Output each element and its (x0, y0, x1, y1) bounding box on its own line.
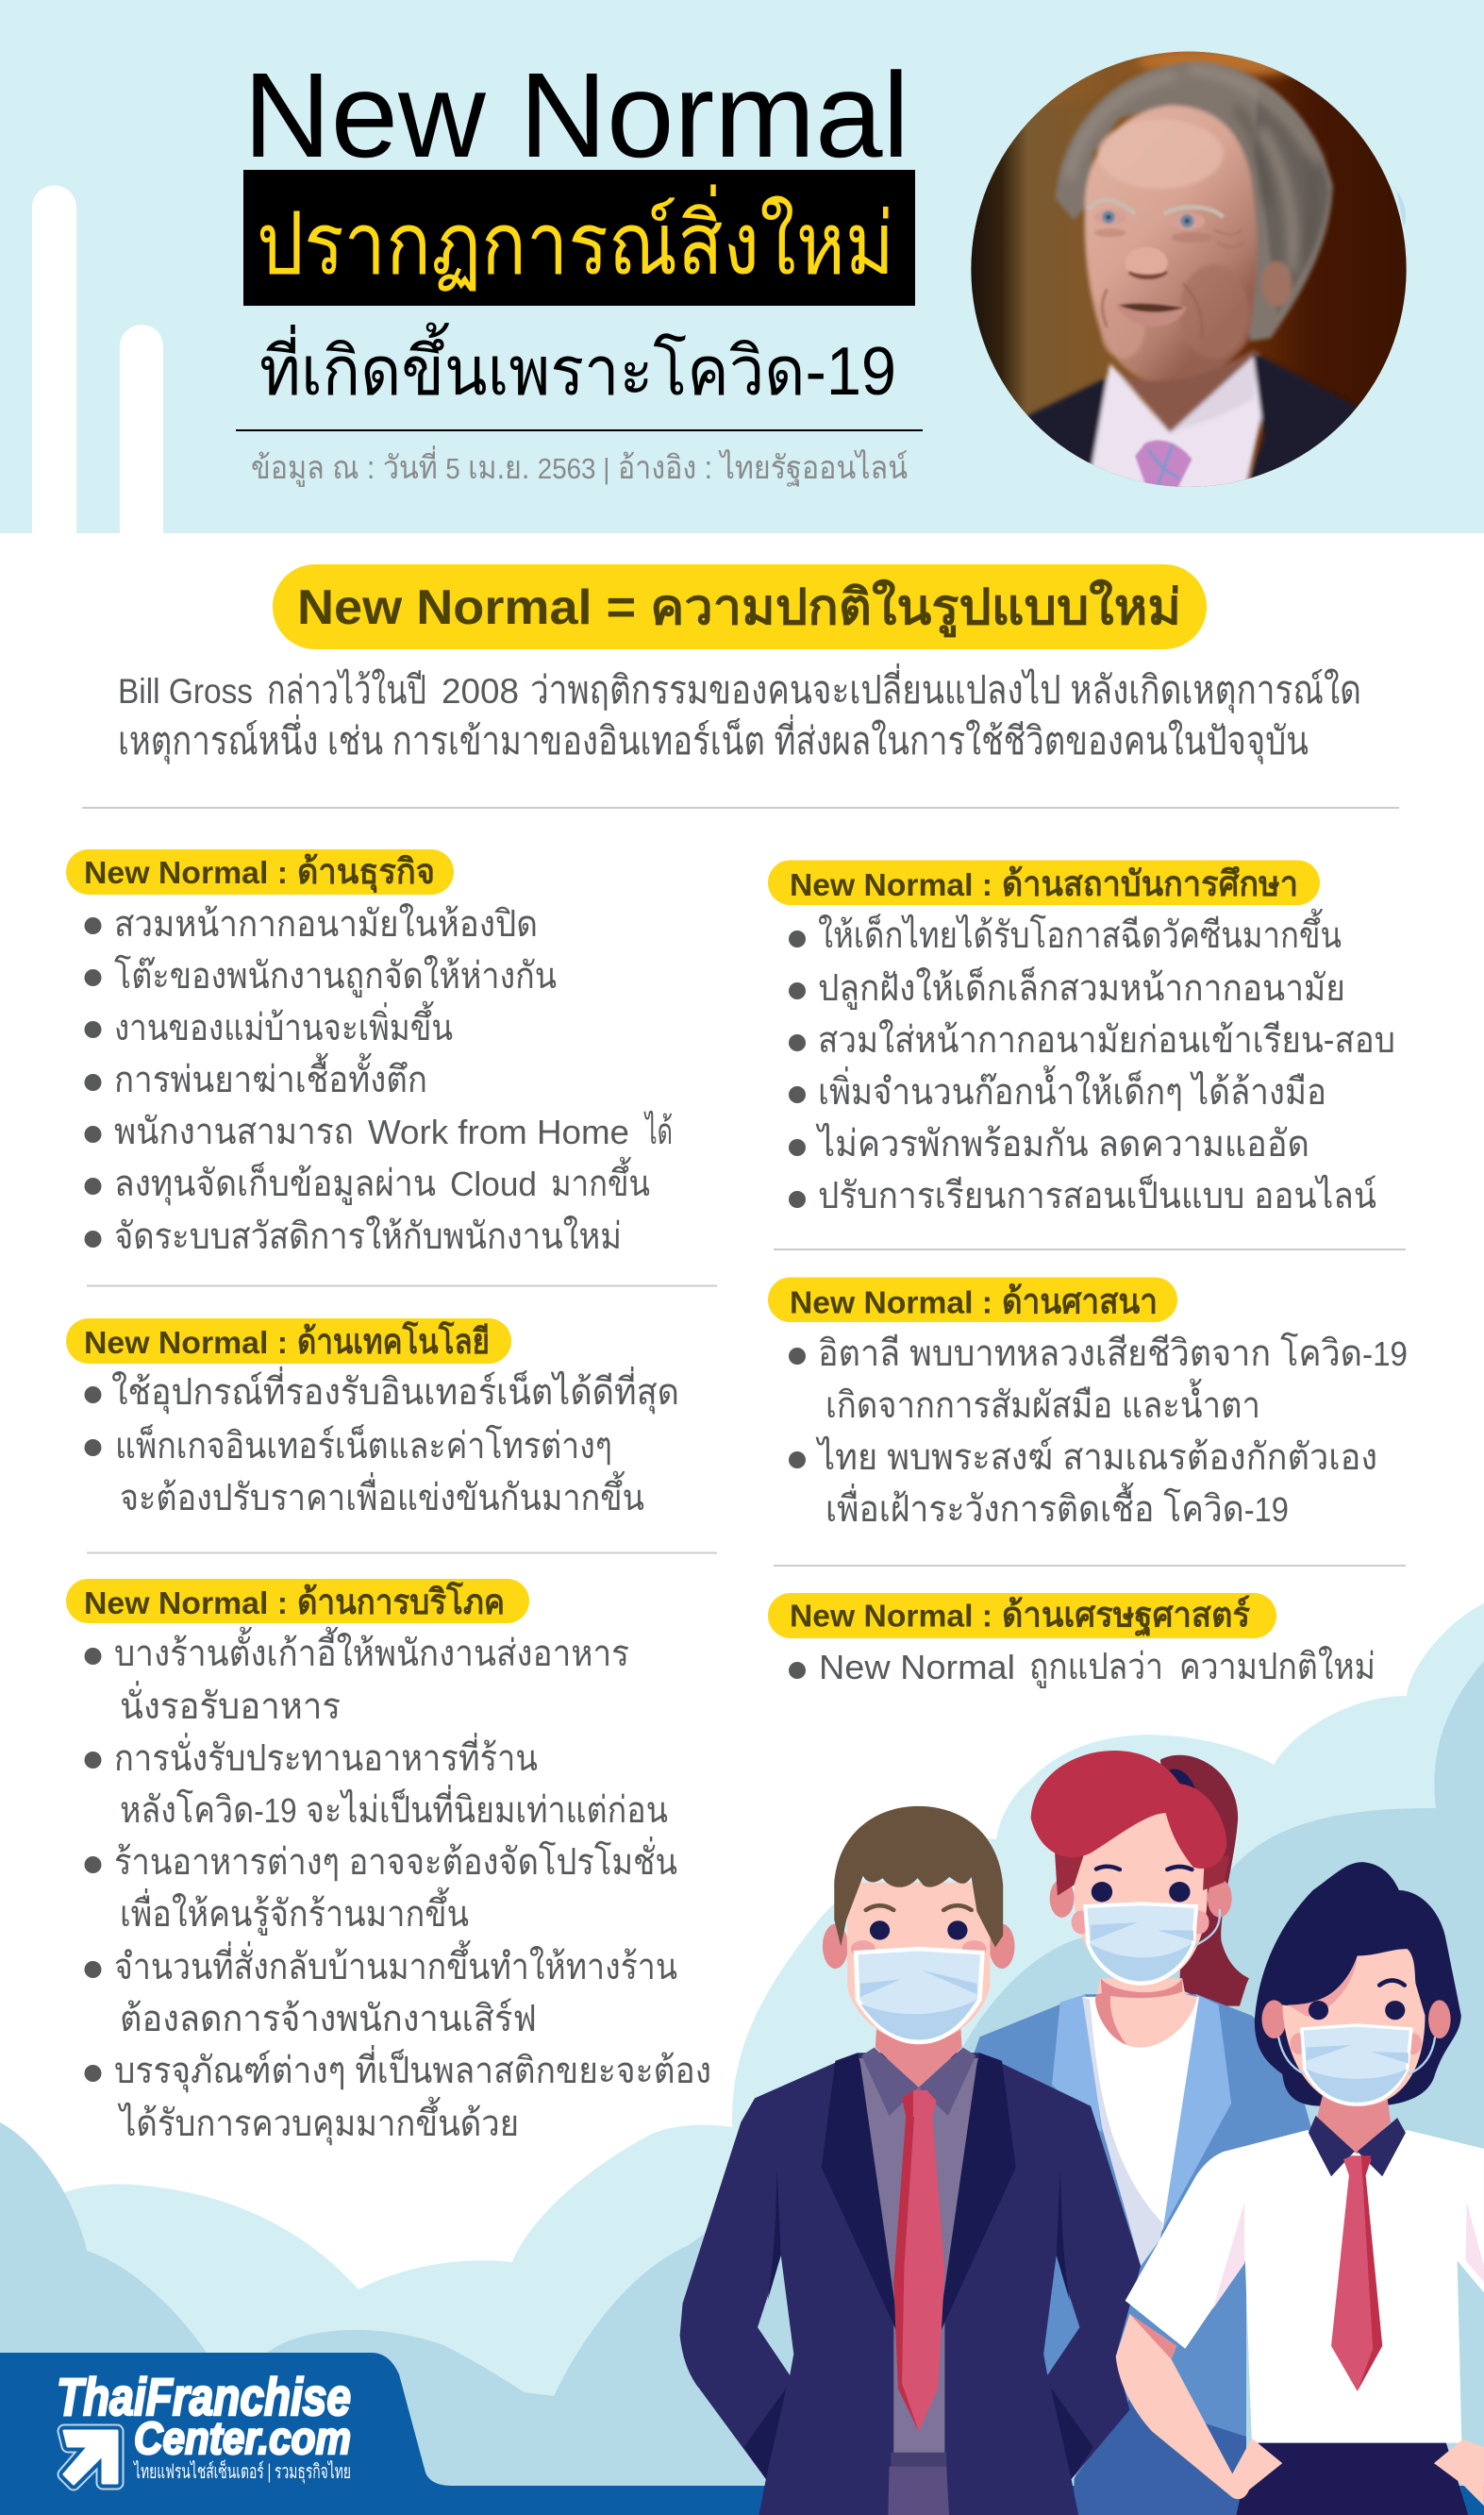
list: consumption: ต้องลดการจ้างพนักงานเสิร์ฟ (120, 1998, 537, 2039)
heading: education (768, 861, 1320, 905)
header background (0, 0, 1484, 533)
list: religion: เกิดจากการสัมผัสมือ และน้ำตา (825, 1378, 1260, 1426)
list: consumption: บางร้านตั้งเก้าอี้ให้พนักงานส่งอาหาร (114, 1626, 629, 1674)
background clouds (0, 1603, 1484, 2515)
list: consumption: เพื่อให้คนรู้จักร้านมากขึ้น (120, 1886, 469, 1936)
heading: business: New Normal : (84, 855, 288, 890)
list: business: มากขึ้น (551, 1156, 650, 1204)
list: business: Cloud (450, 1165, 537, 1203)
list: religion (789, 1333, 1408, 1530)
intro paragraph: 2008 (442, 672, 519, 711)
heading: religion (768, 1278, 1177, 1322)
list: business: ได้ (643, 1111, 673, 1152)
list: consumption: นั่งรอรับอาหาร (120, 1681, 341, 1727)
list: business: สวมหน้ากากอนามัยในห้องปิด (114, 903, 538, 945)
decorative white bars (32, 186, 163, 533)
heading: religion: ด้านศาสนา (1002, 1282, 1158, 1321)
heading: technology: New Normal : (84, 1325, 288, 1360)
heading: consumption: ด้านการบริโภค (297, 1581, 505, 1621)
list: religion: ไทย พบพระสงฆ์ สามเณรต้องกักตัวเอง (815, 1436, 1377, 1478)
list: technology: ใช้อุปกรณ์ที่รองรับอินเทอร์เน็ตได้ดีที่สุด (111, 1366, 679, 1415)
list: business: การพ่นยาฆ่าเชื้อทั้งตึก (114, 1052, 427, 1100)
list: consumption: บรรจุภัณฑ์ต่างๆ ที่เป็นพลาสติกขยะจะต้อง (114, 2045, 711, 2093)
heading: consumption: New Normal : (84, 1585, 288, 1620)
subtitle: ที่เกิดขึ้นเพราะโควิด-19 (259, 322, 896, 410)
list: technology (85, 1366, 679, 1518)
list: business: โต๊ะของพนักงานถูกจัดให้ห่างกัน (114, 955, 557, 998)
title block (243, 48, 915, 410)
heading: business: ด้านธุรกิจ (297, 852, 435, 894)
list: consumption: ได้รับการควบคุมมากขึ้นด้วย (117, 2096, 519, 2146)
list: consumption (85, 1626, 711, 2146)
heading: business (66, 849, 454, 895)
list: education (789, 908, 1395, 1216)
header rule (236, 429, 923, 431)
intro paragraph: กล่าวไว้ในปี (267, 668, 426, 712)
list: economics (789, 1646, 1376, 1688)
list: education: ไม่ควรพักพร้อมกัน ลดความแออัด (815, 1123, 1309, 1165)
list: business: จัดระบบสวัสดิการให้กับพนักงานใหม่ (114, 1216, 622, 1257)
list: consumption: จำนวนที่สั่งกลับบ้านมากขึ้นทำให้ทางร้าน (114, 1939, 677, 1987)
title: New Normal: New Normal (243, 48, 909, 183)
logo: ThaiFranchise Center.com (57, 2367, 351, 2484)
list: economics: New Normal (819, 1648, 1015, 1686)
intro paragraph: เหตุการณ์หนึ่ง เช่น การเข้ามาของอินเทอร์เน็ต ที่ส่งผลในการใช้ชีวิตของคนในปัจจุบัน (118, 714, 1309, 764)
heading: economics: New Normal : (790, 1599, 992, 1633)
list: business: พนักงานสามารถ (114, 1112, 354, 1152)
panel: economics (768, 1593, 1376, 1688)
heading: technology (66, 1318, 511, 1364)
heading: education: New Normal : (790, 867, 992, 902)
list: religion: อิตาลี พบบาทหลวงเสียชีวิตจาก โควิด-19 (818, 1333, 1408, 1374)
heading: education: ด้านสถาบันการศึกษา (1002, 864, 1298, 903)
main headline pill (273, 564, 1207, 649)
footer blue band (0, 2353, 1484, 2515)
list: education: ปลูกฝังให้เด็กเล็กสวมหน้ากากอนามัย (818, 965, 1345, 1010)
decorative crescent behind portrait (1390, 184, 1406, 226)
list: business (85, 903, 673, 1257)
heading: economics (768, 1593, 1276, 1638)
list: business: ลงทุนจัดเก็บข้อมูลผ่าน (114, 1161, 436, 1206)
list: business: Work from Home (368, 1113, 629, 1151)
heading: technology: ด้านเทคโนโลยี (297, 1320, 490, 1361)
list: education: ปรับการเรียนการสอนเป็นแบบ ออนไลน์ (818, 1173, 1376, 1216)
list: technology: จะต้องปรับราคาเพื่อแข่งขันกันมากขึ้น (120, 1470, 644, 1518)
list: economics: ถูกแปลว่า (1029, 1647, 1163, 1688)
source line: ข้อมูล ณ : วันที่ 5 เม.ย. 2563 | อ้างอิง : ไทยรัฐออนไลน์ (251, 445, 908, 487)
heading: economics: ด้านเศรษฐศาสตร์ (1002, 1595, 1250, 1636)
list: business: งานของแม่บ้านจะเพิ่มขึ้น (114, 1000, 453, 1048)
portrait: Bill Gross (969, 45, 1409, 494)
list: consumption: หลังโควิด-19 จะไม่เป็นที่นิยมเท่าแต่ก่อน (120, 1785, 668, 1831)
panel: technology (66, 1318, 679, 1518)
intro paragraph (118, 663, 1361, 764)
panel: consumption (66, 1579, 711, 2146)
figure: man in navy suit (680, 1806, 1141, 2515)
intro paragraph: ว่าพฤติกรรมของคนจะเปลี่ยนแปลงไป หลังเกิดเหตุการณ์ใด (530, 663, 1361, 713)
heading: religion: New Normal : (790, 1285, 992, 1319)
figure: woman in blue blazer (975, 1751, 1314, 2515)
logo: ThaiFranchise Center.com: ThaiFranchise (57, 2367, 351, 2426)
list: economics: ความปกติใหม่ (1179, 1646, 1376, 1687)
list: education: สวมใส่หน้ากากอนามัยก่อนเข้าเรียน-สอบ (818, 1019, 1395, 1061)
panel: education (768, 861, 1395, 1216)
list: education: ให้เด็กไทยได้รับโอกาสฉีดวัคซีนมากขึ้น (818, 908, 1342, 956)
intro paragraph: Bill Gross (118, 672, 253, 711)
logo: ThaiFranchise Center.com: ไทยแฟรนไชส์เซ็นเตอร์ | รวมธุรกิจไทย (133, 2458, 351, 2484)
icon: arrow (64, 2431, 117, 2484)
list: technology: แพ็กเกจอินเทอร์เน็ตและค่าโทรต่างๆ (115, 1423, 612, 1467)
list: consumption: การนั่งรับประทานอาหารที่ร้าน (114, 1733, 538, 1779)
heading: consumption (66, 1579, 529, 1623)
list: consumption: ร้านอาหารต่างๆ อาจจะต้องจัดโปรโมชั่น (114, 1836, 677, 1883)
list: education: เพิ่มจำนวนก๊อกน้ำให้เด็กๆ ได้ล้างมือ (818, 1065, 1326, 1113)
panel: business (66, 849, 673, 1257)
main headline pill: New Normal = ความปกติในรูปแบบใหม่ (297, 578, 1181, 638)
title banner (243, 170, 915, 306)
figure: woman in white shirt (1116, 1862, 1484, 2515)
title banner: ปรากฏการณ์สิ่งใหม่ (257, 184, 894, 293)
illustration: three masked workers (680, 1751, 1484, 2515)
panel: religion (768, 1278, 1408, 1530)
logo: ThaiFranchise Center.com: Center.com (134, 2414, 351, 2464)
list: religion: เพื่อเฝ้าระวังการติดเชื้อ โควิด-19 (825, 1482, 1289, 1530)
